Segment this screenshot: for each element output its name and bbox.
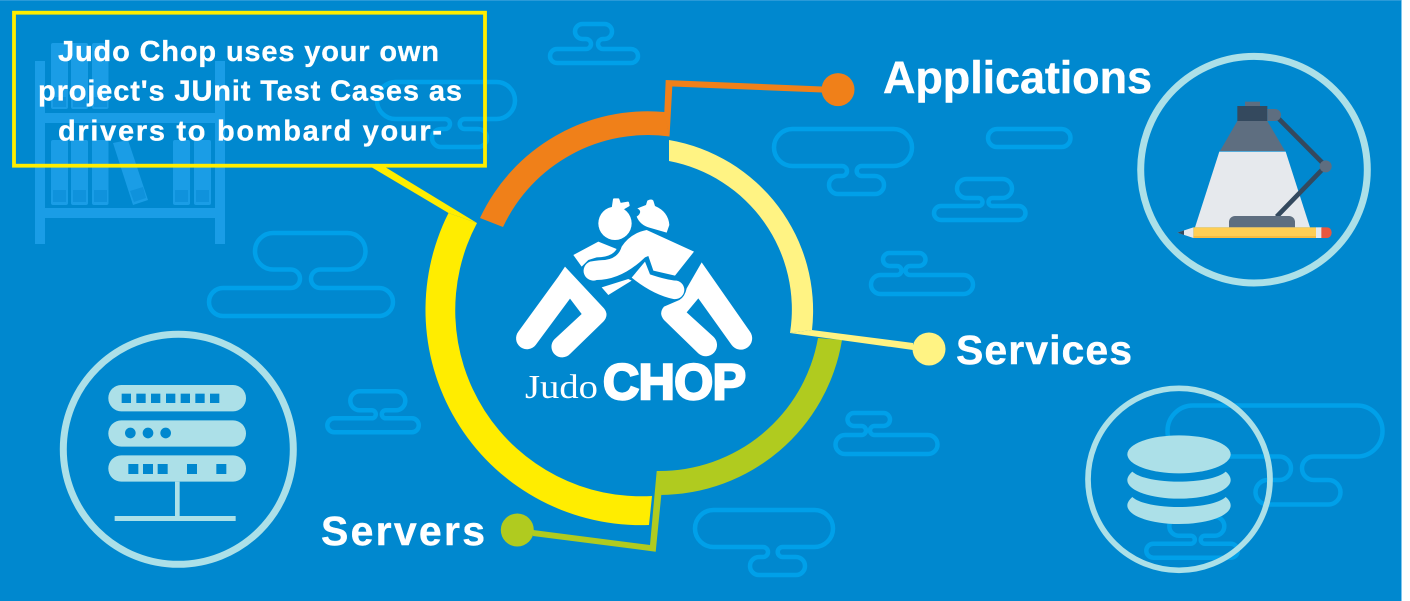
logo wordmark: CHOP: CHOP xyxy=(603,354,746,410)
ring segment: servers (green) with leader and dot xyxy=(501,338,842,552)
icon: database xyxy=(1088,388,1270,570)
background: clouds xyxy=(209,24,1382,575)
callout box: drivers to bombard your- xyxy=(58,116,442,148)
icon: lamp and pencil xyxy=(1141,56,1367,283)
logo wordmark: Judo: Judo xyxy=(525,369,598,406)
callout box xyxy=(14,13,485,166)
ring segment: services (pale yellow) with leader and dot xyxy=(669,140,946,366)
label: Servers: Servers xyxy=(321,508,485,554)
ring segment: yellow with callout pointer xyxy=(372,166,652,525)
background: bookshelf xyxy=(35,43,225,244)
callout box: project's JUnit Test Cases as xyxy=(38,76,462,108)
icon: server xyxy=(63,334,293,564)
label: Applications: Applications xyxy=(883,52,1152,103)
callout box: Judo Chop uses your own xyxy=(58,36,439,68)
ring segment: applications (orange) with leader and dot xyxy=(480,73,854,227)
label: Services: Services xyxy=(956,327,1132,373)
logo: wrestlers xyxy=(516,199,752,357)
